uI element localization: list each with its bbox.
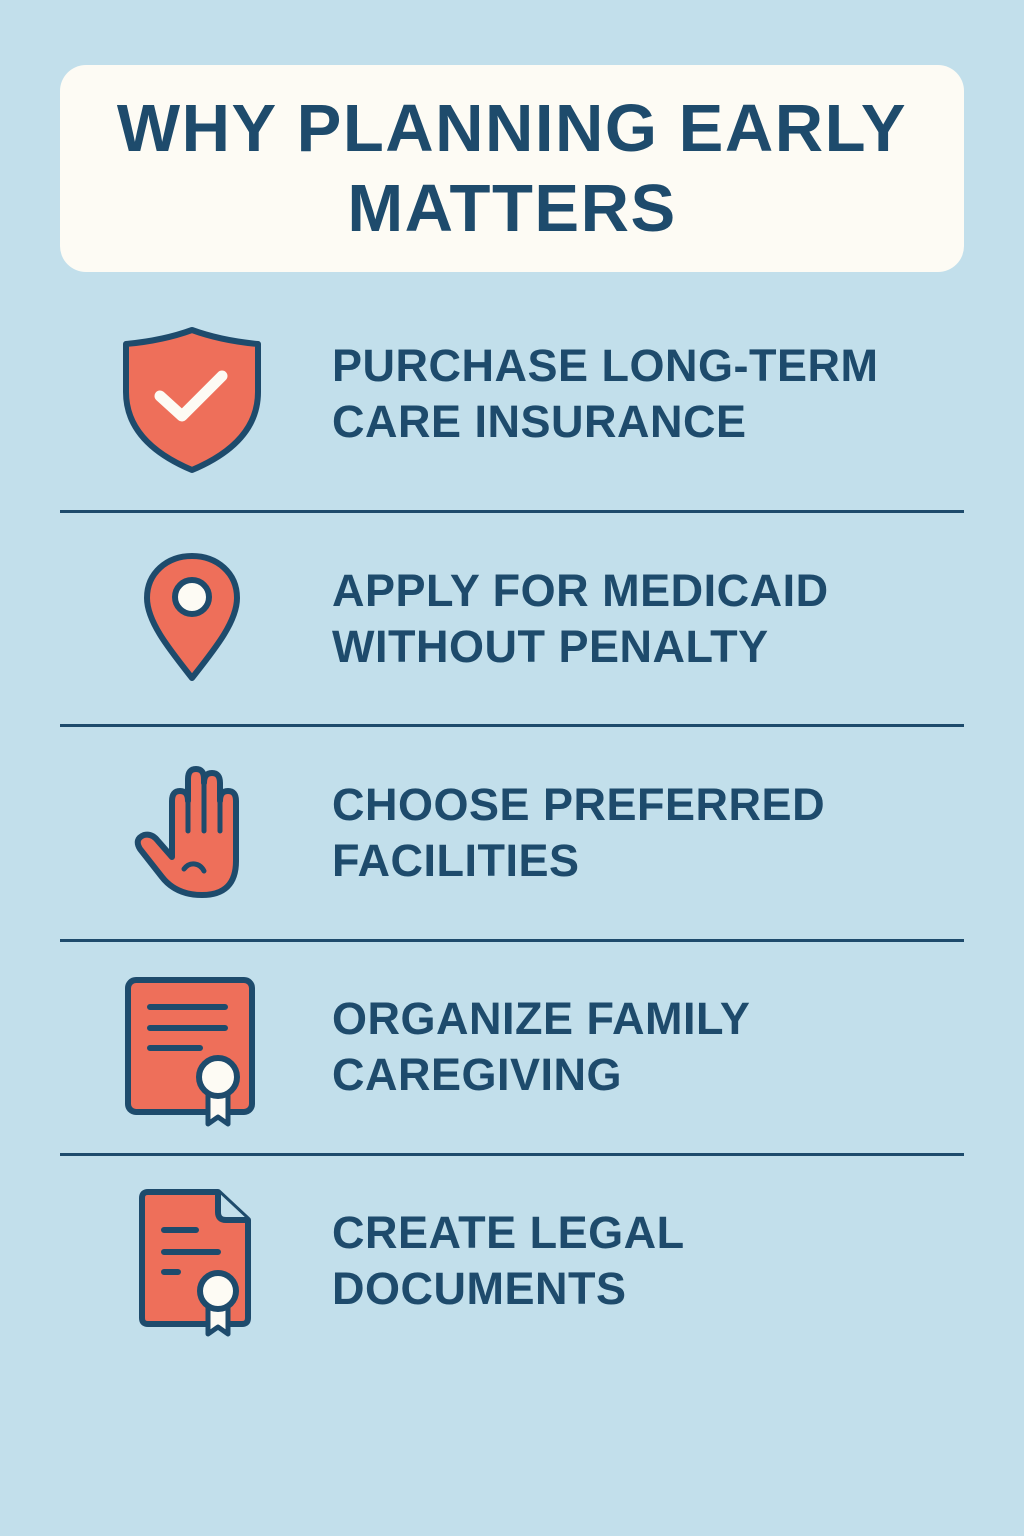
text: item 4: ORGANIZE FAMILY xyxy=(332,993,750,1044)
icon: map pin xyxy=(144,553,240,681)
text: item 5: CREATE LEGAL xyxy=(332,1207,685,1258)
icon: hand xyxy=(134,766,239,898)
icon: shield xyxy=(123,327,261,473)
text: item 2 xyxy=(332,565,829,672)
title: MATTERS xyxy=(347,171,677,246)
text: item 4: CAREGIVING xyxy=(332,1049,622,1100)
icon: document xyxy=(139,1189,251,1336)
text: item 1: CARE INSURANCE xyxy=(332,396,747,447)
title xyxy=(60,65,964,272)
text: item 1 xyxy=(332,340,878,447)
text: item 3: CHOOSE PREFERRED xyxy=(332,779,825,830)
text: item 5 xyxy=(332,1207,685,1314)
text: item 1: PURCHASE LONG-TERM xyxy=(332,340,878,391)
text: item 2: WITHOUT PENALTY xyxy=(332,621,769,672)
text: item 5: DOCUMENTS xyxy=(332,1263,626,1314)
text: item 4 xyxy=(332,993,750,1100)
title: WHY PLANNING EARLY xyxy=(117,91,907,166)
text: item 3 xyxy=(332,779,825,886)
text: item 2: APPLY FOR MEDICAID xyxy=(332,565,829,616)
icon: certificate xyxy=(125,977,255,1126)
text: item 3: FACILITIES xyxy=(332,835,580,886)
